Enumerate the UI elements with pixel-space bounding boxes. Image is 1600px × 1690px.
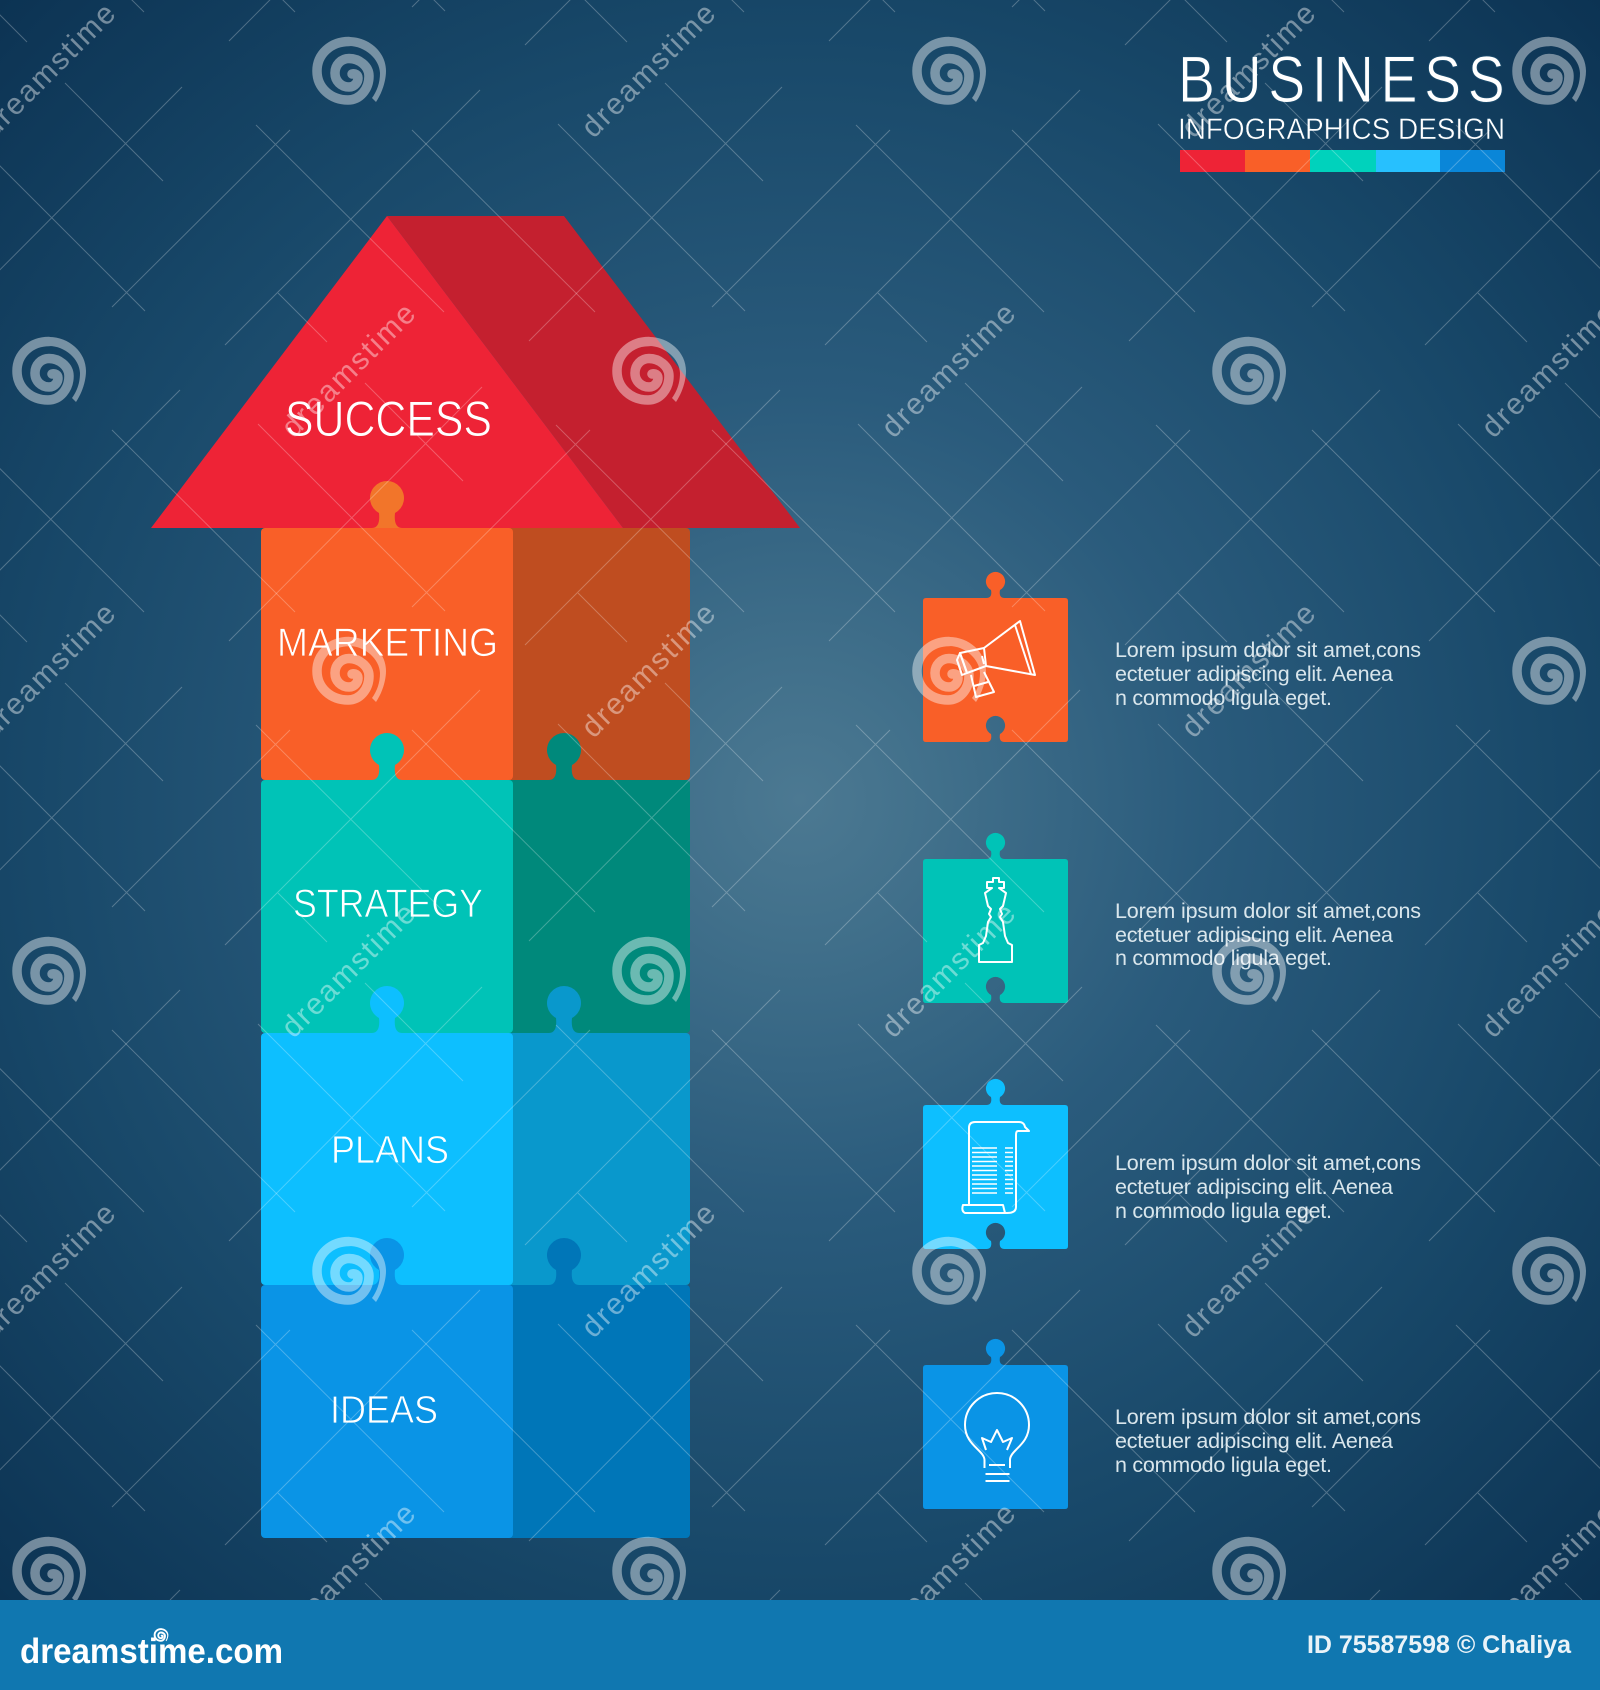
roof: success: SUCCESS (285, 391, 492, 447)
text block (1115, 899, 1421, 970)
roof: success (151, 216, 800, 528)
text block: n commodo ligula eget. (1115, 1453, 1332, 1477)
text block: Lorem ipsum dolor sit amet,cons (1115, 1151, 1421, 1175)
puzzle piece: sky blue (923, 1079, 1068, 1249)
block: plans (261, 986, 690, 1285)
block: ideas (261, 1238, 690, 1538)
block: marketing: MARKETING (277, 621, 498, 665)
footer bar (0, 1600, 1600, 1690)
watermark pattern: wordmarks: dreamstime (1175, 1197, 1322, 1344)
text block: Lorem ipsum dolor sit amet,cons (1115, 638, 1421, 662)
text block: n commodo ligula eget. (1115, 1199, 1332, 1223)
icon: chess king (979, 878, 1012, 962)
icon: scroll (962, 1122, 1029, 1213)
text block: n commodo ligula eget. (1115, 946, 1332, 970)
block: ideas: IDEAS (330, 1389, 438, 1432)
text block (1115, 638, 1421, 710)
watermark pattern: wordmarks: dreamstime (575, 597, 722, 744)
block: strategy: STRATEGY (293, 882, 483, 926)
puzzle piece: blue (923, 1339, 1068, 1509)
item: plans (923, 1079, 1421, 1249)
block: marketing (261, 481, 690, 780)
watermark pattern: wordmarks: dreamstime (1175, 0, 1322, 144)
item: marketing (923, 572, 1421, 742)
watermark pattern: wordmarks: dreamstime (1175, 597, 1322, 744)
item: strategy (923, 833, 1421, 1003)
text block: ectetuer adipiscing elit. Aenea (1115, 1175, 1393, 1199)
icon: light bulb (965, 1393, 1029, 1481)
block: strategy (261, 733, 690, 1033)
footer logo: dreamstime.com (20, 1632, 283, 1671)
watermark pattern: wordmarks: dreamstime (275, 297, 422, 444)
watermark pattern: wordmarks: dreamstime (875, 1497, 1022, 1644)
watermark pattern: wordmarks: dreamstime (875, 297, 1022, 444)
text block: Lorem ipsum dolor sit amet,cons (1115, 899, 1421, 923)
footer credit: ID 75587598 © Chaliya (1307, 1631, 1572, 1659)
colour bar (1180, 150, 1505, 172)
puzzle piece: teal (923, 833, 1068, 1003)
text block: ectetuer adipiscing elit. Aenea (1115, 923, 1393, 947)
title block (1178, 42, 1505, 172)
watermark pattern: wordmarks: dreamstime (275, 1497, 422, 1644)
text block: Lorem ipsum dolor sit amet,cons (1115, 1405, 1421, 1429)
text block (1115, 1405, 1421, 1477)
item: ideas (923, 1339, 1421, 1509)
watermark pattern: wordmarks: dreamstime (575, 1197, 722, 1344)
icon: megaphone (957, 621, 1035, 697)
text block: ectetuer adipiscing elit. Aenea (1115, 1429, 1393, 1453)
text block: n commodo ligula eget. (1115, 686, 1332, 710)
puzzle piece: orange (923, 572, 1068, 742)
heading: business: BUSINESS (1178, 42, 1505, 116)
block: plans: PLANS (331, 1129, 449, 1172)
text block: ectetuer adipiscing elit. Aenea (1115, 662, 1393, 686)
text block (1115, 1151, 1421, 1223)
watermark pattern: wordmarks: dreamstime (875, 897, 1022, 1044)
watermark pattern: wordmarks: dreamstime (275, 897, 422, 1044)
arrow tower (151, 216, 800, 1538)
subheading: INFOGRAPHICS DESIGN (1178, 113, 1505, 146)
watermark pattern: wordmarks: dreamstime (575, 0, 722, 144)
